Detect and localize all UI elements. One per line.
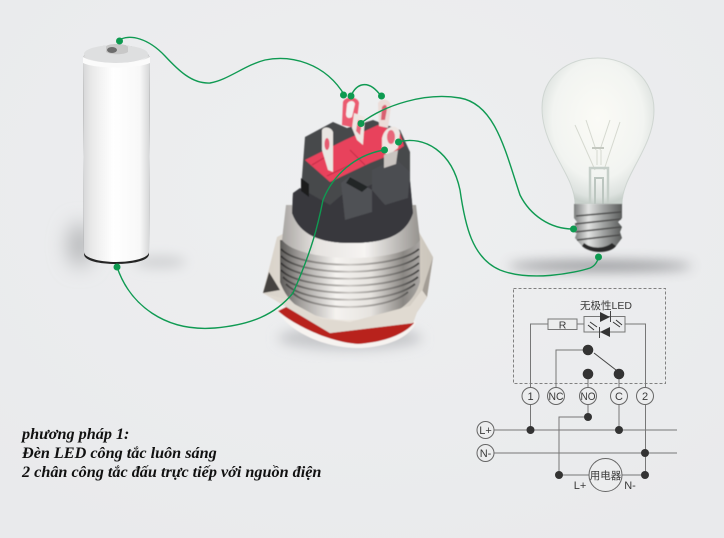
- circuit diagram: N-: [480, 448, 492, 460]
- screw base: [574, 204, 622, 252]
- junction dots: [526, 413, 649, 479]
- circuit diagram: L+: [574, 480, 586, 492]
- black body: [292, 120, 413, 243]
- terminal: back left: [342, 98, 359, 128]
- LED symbol: [584, 311, 625, 338]
- circuit diagram: 1: [527, 391, 534, 403]
- circuit diagram: NC: [548, 391, 564, 403]
- caption: phương pháp 1:: [20, 425, 129, 443]
- dashed box: [514, 288, 666, 384]
- terminal: back right: [378, 99, 391, 128]
- resistor: R: [559, 320, 567, 332]
- circuit diagram: N-: [624, 480, 636, 492]
- circuit diagram: [477, 288, 677, 492]
- circuit diagram: 2: [642, 391, 648, 403]
- contacts: [583, 345, 593, 355]
- connection dots: [114, 38, 602, 270]
- circuit diagram: 用电器: [590, 469, 622, 482]
- terminal: middle: [352, 113, 365, 145]
- circuit diagram: C: [615, 391, 623, 403]
- terminal: front right: [382, 127, 400, 156]
- caption: Đèn LED công tắc luôn sáng: [21, 444, 217, 462]
- red seal ring: [276, 300, 416, 348]
- nut front band: [263, 290, 427, 333]
- filament: [575, 120, 620, 204]
- circuit diagram: L+: [479, 425, 492, 437]
- terminal: front left: [322, 128, 333, 172]
- icon: switch: [263, 98, 433, 350]
- wires: [117, 37, 599, 328]
- circuit diagram: NO: [580, 391, 596, 403]
- icon: light bulb: [508, 58, 692, 271]
- LED label: 无极性LED: [580, 299, 632, 312]
- icon: battery: [68, 44, 186, 268]
- terminals: [477, 388, 654, 492]
- hex nut: [263, 225, 433, 333]
- caption: [20, 425, 321, 481]
- caption: 2 chân công tắc đấu trực tiếp với nguồn điện: [21, 463, 321, 481]
- resistor: [548, 319, 577, 332]
- metal collar: [282, 205, 420, 258]
- red insert: [305, 125, 404, 182]
- threaded barrel: [280, 240, 420, 320]
